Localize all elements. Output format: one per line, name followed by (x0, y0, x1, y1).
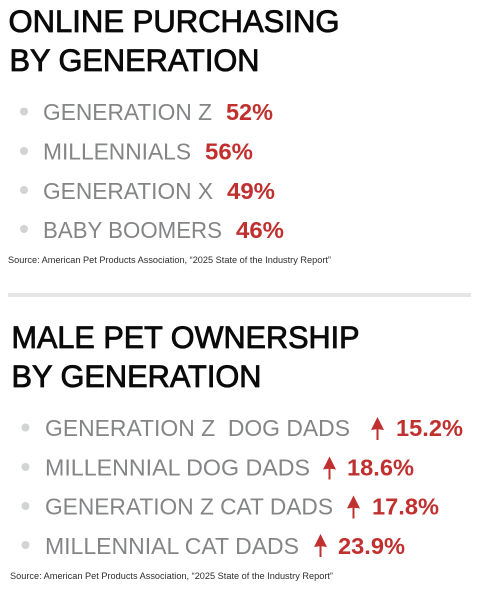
list row: Generation Z 52%: 52% (226, 99, 273, 125)
heading: online purchasing by generation: ONLINE PURCHASING (8, 3, 340, 39)
heading: male pet ownership by generation (12, 319, 360, 394)
list row: Generation Z 52% (20, 99, 273, 125)
icon: up arrow (347, 496, 360, 518)
list row: Generation Z dog dads up 15.2%: GENERATION Z DOG DADS (45, 415, 350, 441)
list row: Generation Z cat dads up 17.8% (22, 494, 439, 520)
icon: up arrow (371, 417, 384, 440)
list row: Baby Boomers 46%: BABY BOOMERS (43, 217, 222, 243)
list row: Millennial cat dads up 23.9%: 23.9% (338, 533, 405, 559)
list row: Millennials 56%: MILLENNIALS (43, 138, 191, 164)
list row: Generation Z cat dads up 17.8%: 17.8% (372, 494, 439, 520)
list row: Generation Z dog dads up 15.2% (22, 415, 463, 441)
list row: Generation Z 52%: GENERATION Z (43, 99, 212, 125)
list row: Generation X 49%: GENERATION X (43, 178, 213, 204)
list row: Baby Boomers 46%: 46% (236, 217, 284, 243)
panel: online purchasing (8, 3, 340, 265)
icon: up arrow (323, 456, 336, 480)
list row: Millennial cat dads up 23.9% (22, 533, 405, 559)
list row: Generation X 49%: 49% (227, 178, 275, 204)
list row: Generation Z cat dads up 17.8%: GENERATION Z CAT DADS (45, 494, 333, 520)
heading: online purchasing by generation: BY GENERATION (10, 42, 260, 78)
list row: Generation Z dog dads up 15.2%: 15.2% (396, 415, 463, 441)
icon: up arrow (314, 534, 327, 557)
source note: Source: American Pet Products Association, “2025 State of the Industry Report” (8, 255, 331, 265)
heading: male pet ownership by generation: MALE PET OWNERSHIP (12, 319, 360, 355)
heading: male pet ownership by generation: BY GENERATION (12, 358, 262, 394)
list row: Generation X 49% (20, 178, 275, 204)
heading: online purchasing by generation (8, 3, 340, 78)
source note: Source: American Pet Products Association, “2025 State of the Industry Report” (10, 571, 333, 581)
list row: Millennial dog dads up 18.6% (22, 454, 414, 480)
panel: male pet ownership (10, 319, 463, 581)
list row: Millennial cat dads up 23.9%: MILLENNIAL CAT DADS (45, 533, 299, 559)
list row: Millennial dog dads up 18.6%: 18.6% (347, 454, 414, 480)
list row: Millennials 56%: 56% (205, 138, 253, 164)
list row: Millennials 56% (20, 138, 253, 164)
list row: Millennial dog dads up 18.6%: MILLENNIAL DOG DADS (45, 454, 310, 480)
